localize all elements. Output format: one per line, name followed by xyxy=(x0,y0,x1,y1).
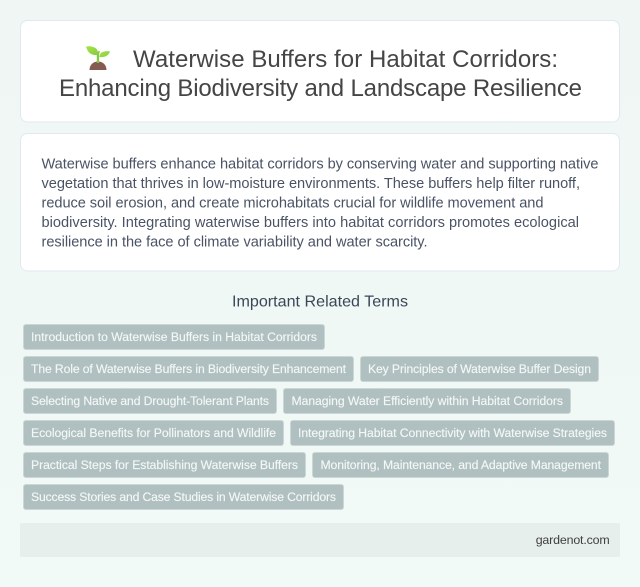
tag xyxy=(24,420,284,446)
tag: Ecological Benefits for Pollinators and Wildlife xyxy=(31,426,276,440)
title text: Waterwise Buffers for Habitat Corridors: xyxy=(133,46,558,73)
tag: Introduction to Waterwise Buffers in Habitat Corridors xyxy=(31,330,317,344)
tag: Success Stories and Case Studies in Waterwise Corridors xyxy=(31,490,336,504)
description text: Waterwise buffers enhance habitat corridors by conserving water and supporting native xyxy=(42,156,598,172)
tag xyxy=(284,388,570,414)
tag xyxy=(24,484,344,510)
heading: important related terms: Important Related Terms xyxy=(232,293,408,311)
tag: Selecting Native and Drought-Tolerant Plants xyxy=(31,394,269,408)
tag: Integrating Habitat Connectivity with Waterwise Strategies xyxy=(298,426,607,440)
title text: Enhancing Biodiversity and Landscape Resilience xyxy=(59,75,582,102)
tag: Monitoring, Maintenance, and Adaptive Management xyxy=(320,458,602,472)
title text xyxy=(59,46,582,102)
description text: reduce soil erosion, and create microhabitats crucial for wildlife movement and xyxy=(42,195,544,211)
tag: Practical Steps for Establishing Waterwise Buffers xyxy=(31,458,298,472)
tag xyxy=(290,420,614,446)
panel: description card xyxy=(20,134,620,271)
description text xyxy=(42,156,598,250)
description text: biodiversity. Integrating waterwise buffers into habitat corridors promotes ecological xyxy=(42,215,579,231)
description text: resilience in the face of climate variability and water scarcity. xyxy=(42,234,428,250)
tag xyxy=(24,356,354,382)
tag xyxy=(24,452,306,478)
panel: related term tags xyxy=(24,324,614,510)
tag: The Role of Waterwise Buffers in Biodiversity Enhancement xyxy=(31,362,347,376)
panel: title card xyxy=(20,20,620,122)
tag: Key Principles of Waterwise Buffer Design xyxy=(368,362,591,376)
footer: gardenot.com xyxy=(536,533,610,547)
description text: vegetation that thrives in low-moisture environments. These buffers help filter runoff, xyxy=(42,176,580,192)
footer xyxy=(20,523,620,557)
tag: Managing Water Efficiently within Habitat Corridors xyxy=(292,394,563,408)
tag xyxy=(312,452,608,478)
tag xyxy=(360,356,598,382)
icon: seedling xyxy=(86,46,110,70)
tag xyxy=(24,324,324,350)
tag xyxy=(24,388,276,414)
